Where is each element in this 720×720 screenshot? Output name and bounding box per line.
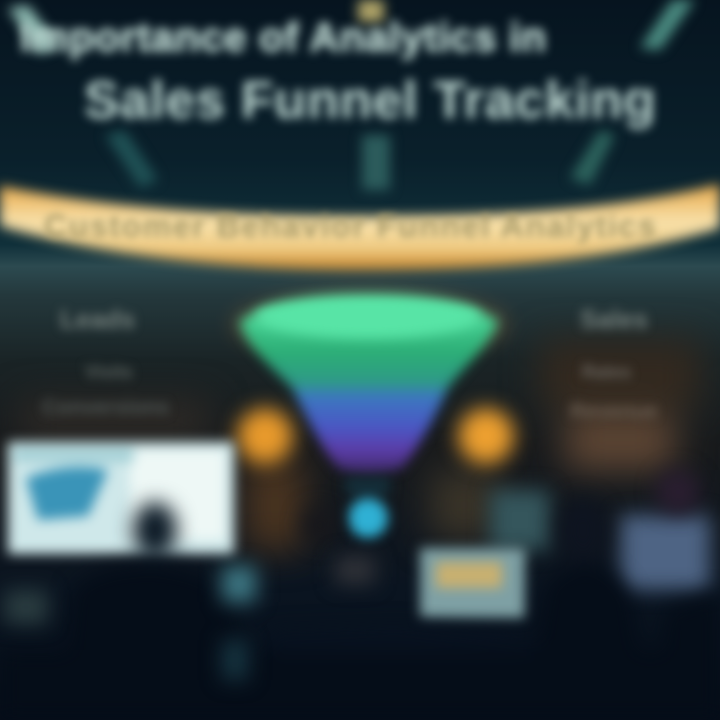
icon: funnel top ellipse [254, 294, 482, 338]
left stat label [42, 304, 169, 419]
icon: funnel glow [232, 291, 508, 359]
right stat label [568, 304, 658, 423]
warm mid-room glow [20, 340, 700, 550]
right label one: Sales [580, 304, 648, 334]
title line two: Sales Funnel Tracking [84, 71, 656, 130]
title line one: Importance of Analytics in [20, 14, 547, 60]
left label one: Leads [60, 304, 135, 334]
icon: left orange lamp [237, 408, 293, 464]
top light streaks [8, 0, 695, 190]
title [14, 14, 660, 136]
funnel chart [232, 291, 508, 538]
presentation screen [8, 442, 234, 554]
audience silhouettes [0, 470, 720, 720]
left label three: Conversions [42, 396, 169, 419]
banner subtitle: Customer Behavior Funnel Analytics [44, 208, 657, 244]
left label two: Visits [85, 362, 133, 382]
small lower glows [4, 556, 375, 680]
icon: funnel body [240, 305, 498, 474]
icon: yellow banner ribbon [0, 184, 720, 270]
icon: right orange lamp [458, 408, 514, 464]
tablet screen [420, 548, 525, 618]
right label three: Revenue [570, 400, 658, 423]
right side tablet device [490, 490, 710, 590]
right label two: Rates [582, 362, 631, 382]
icon: funnel spout drop [345, 478, 390, 538]
